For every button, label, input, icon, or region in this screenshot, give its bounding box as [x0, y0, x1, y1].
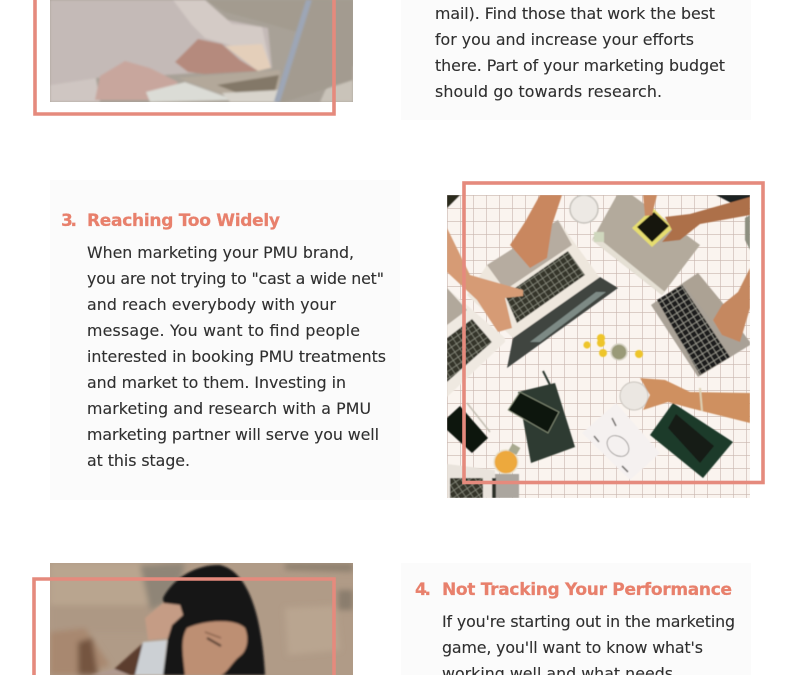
text block: mistake 4 description: game, you'll want to know what's [442, 638, 703, 657]
text block: mistake 3 description: at this stage. [87, 451, 190, 470]
tablet [650, 403, 733, 478]
bottom-left laptop [447, 464, 495, 498]
photo: team with laptops on a tiled table [447, 195, 750, 498]
lower-left laptop [447, 288, 505, 397]
text block: mistake 3 description: message. You want to find people [87, 321, 360, 340]
text block: mistake 3 description: you are not trying to "cast a wide net" [87, 269, 384, 288]
text block: mistake 3 description: and reach everybody with your [87, 295, 336, 314]
panel: text card continued from mistake two: for you and increase your efforts [435, 30, 694, 49]
juice [494, 450, 518, 474]
text block: mistake 3 description: marketing and research with a PMU [87, 399, 371, 418]
panel: text card continued from mistake two [401, 0, 751, 120]
heading: reaching too widely: 3. [61, 211, 77, 231]
frame: photo four outline [34, 579, 334, 675]
heading: reaching too widely: Reaching Too Widely [87, 211, 280, 231]
left phone [447, 406, 488, 453]
right laptop [651, 273, 750, 377]
panel: mistake 3 reaching too widely [50, 180, 400, 500]
paper [582, 403, 660, 480]
left laptop [467, 220, 600, 338]
notebook [518, 383, 575, 463]
text block: mistake 3 description: and market to them. Investing in [87, 373, 346, 392]
heading: not tracking your performance: 4. [415, 580, 431, 600]
glass [570, 195, 598, 223]
frame: photo three outline [464, 183, 763, 482]
photo: woman with dark hair looking down [50, 563, 353, 675]
panel: text card continued from mistake two: should go towards research. [435, 82, 662, 101]
text block: mistake 3 description [87, 243, 386, 470]
panel: mistake 4 not tracking your performance [401, 563, 751, 675]
frame: photo one outline [35, 0, 334, 114]
text block: mistake 4 description: If you're starting out in the marketing [442, 612, 735, 631]
phone on laptop [632, 208, 673, 247]
heading: not tracking your performance: Not Tracking Your Performance [442, 580, 732, 600]
closed laptop [592, 195, 700, 295]
panel: text card continued from mistake two: mail). Find those that work the best [435, 4, 715, 23]
arms and hands [510, 195, 562, 268]
panel: text card continued from mistake two: there. Part of your marketing budget [435, 56, 725, 75]
text block: mistake 3 description: When marketing your PMU brand, [87, 243, 354, 262]
text block: mistake 3 description: marketing partner will serve you well [87, 425, 379, 444]
text block: mistake 4 description [442, 612, 735, 675]
coins [583, 341, 591, 349]
photo: hands typing on a laptop [50, 0, 353, 102]
text block: mistake 3 description: interested in booking PMU treatments [87, 347, 386, 366]
